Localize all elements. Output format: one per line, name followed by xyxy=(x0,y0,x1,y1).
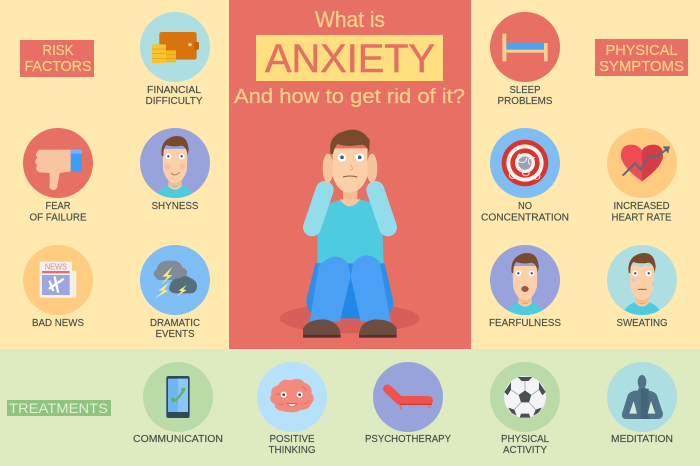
panel: physical symptoms xyxy=(481,12,688,329)
item: fear of failure: FEAR xyxy=(46,200,71,212)
item: sleep problems: SLEEP xyxy=(510,84,540,96)
item: fearfulness: FEARFULNESS xyxy=(489,317,561,329)
item: dramatic events: EVENTS xyxy=(156,328,194,340)
item: bad news: NEWS xyxy=(45,262,67,271)
item: financial difficulty xyxy=(140,12,210,107)
item: communication: COMMUNICATION xyxy=(133,433,223,445)
panel: treatments xyxy=(7,362,677,456)
item: meditation: MEDITATION xyxy=(611,433,673,445)
badge: physical symptoms: SYMPTOMS xyxy=(599,58,684,75)
item: sweating: SWEATING xyxy=(616,317,668,329)
badge: physical symptoms: PHYSICAL xyxy=(606,42,678,59)
panel: risk factors xyxy=(20,12,210,340)
item: physical activity xyxy=(490,362,560,456)
item: bad news: BAD NEWS xyxy=(32,317,84,329)
figure: anxious man sitting xyxy=(280,130,420,338)
item: fear of failure xyxy=(23,128,93,224)
item: positive thinking: THINKING xyxy=(268,444,316,456)
panel: treatments background xyxy=(0,349,700,466)
item: positive thinking xyxy=(257,362,327,456)
title: anxiety: ANXIETY xyxy=(265,37,435,81)
item: physical activity: PHYSICAL xyxy=(501,433,549,445)
background: cream xyxy=(0,0,700,349)
item: fearfulness xyxy=(489,245,561,329)
item: financial difficulty: DIFFICULTY xyxy=(146,95,202,107)
item: no concentration xyxy=(481,128,569,224)
item: shyness xyxy=(140,128,210,212)
item: increased heart rate: INCREASED xyxy=(614,200,670,212)
item: physical activity: ACTIVITY xyxy=(503,444,547,456)
item: dramatic events: DRAMATIC xyxy=(150,317,200,329)
item: fear of failure: OF FAILURE xyxy=(30,212,86,224)
panel: center title and figure xyxy=(229,0,471,349)
item: sleep problems: PROBLEMS xyxy=(498,95,552,107)
item: bad news xyxy=(23,245,93,329)
item: financial difficulty: FINANCIAL xyxy=(147,84,201,96)
badge: risk factors: FACTORS xyxy=(24,58,92,75)
item: no concentration: CONCENTRATION xyxy=(481,212,569,224)
badge: risk factors: RISK xyxy=(42,42,74,59)
item: positive thinking: POSITIVE xyxy=(270,433,314,445)
item: communication xyxy=(133,362,223,445)
item: no concentration: NO xyxy=(518,200,532,212)
subtitle: And how to get rid of it? xyxy=(234,86,465,108)
item: psychotherapy xyxy=(365,362,451,445)
item: shyness: SHYNESS xyxy=(152,200,198,212)
badge: treatments: TREATMENTS xyxy=(9,400,108,416)
item: psychotherapy: PSYCHOTHERAPY xyxy=(365,433,451,445)
item: meditation xyxy=(607,362,677,445)
badge: risk factors xyxy=(20,40,94,77)
item: increased heart rate xyxy=(607,128,677,224)
item: increased heart rate: HEART RATE xyxy=(612,212,672,224)
item: sweating xyxy=(607,245,677,329)
heading: what is: What is xyxy=(315,7,385,32)
badge: physical symptoms xyxy=(595,39,688,76)
item: sleep problems xyxy=(490,12,560,107)
item: dramatic events xyxy=(140,245,210,340)
